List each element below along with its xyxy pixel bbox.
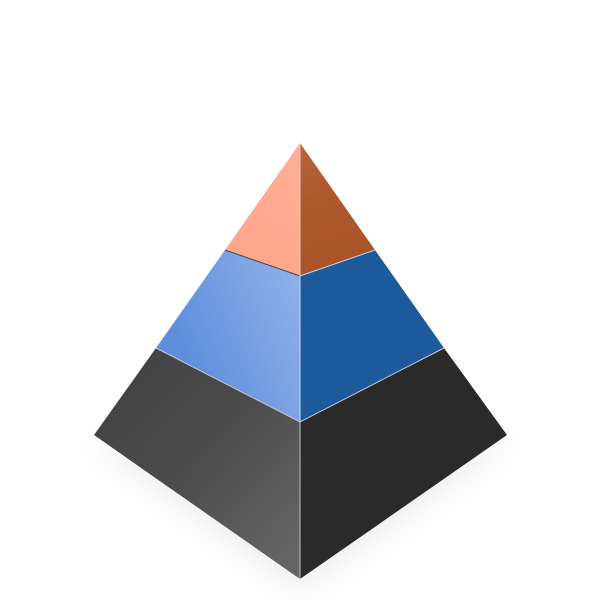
tier edge highlights xyxy=(156,143,444,579)
ground shadow xyxy=(90,420,512,590)
middle tier: blue xyxy=(156,250,444,422)
bottom tier right face xyxy=(300,348,507,579)
bottom tier: dark grey xyxy=(94,348,507,579)
middle tier right face xyxy=(300,250,444,422)
top tier left face xyxy=(225,143,300,276)
bottom tier left face xyxy=(94,348,300,579)
middle tier left face xyxy=(156,250,300,422)
top tier: orange xyxy=(225,143,375,276)
top tier right face xyxy=(300,143,375,276)
